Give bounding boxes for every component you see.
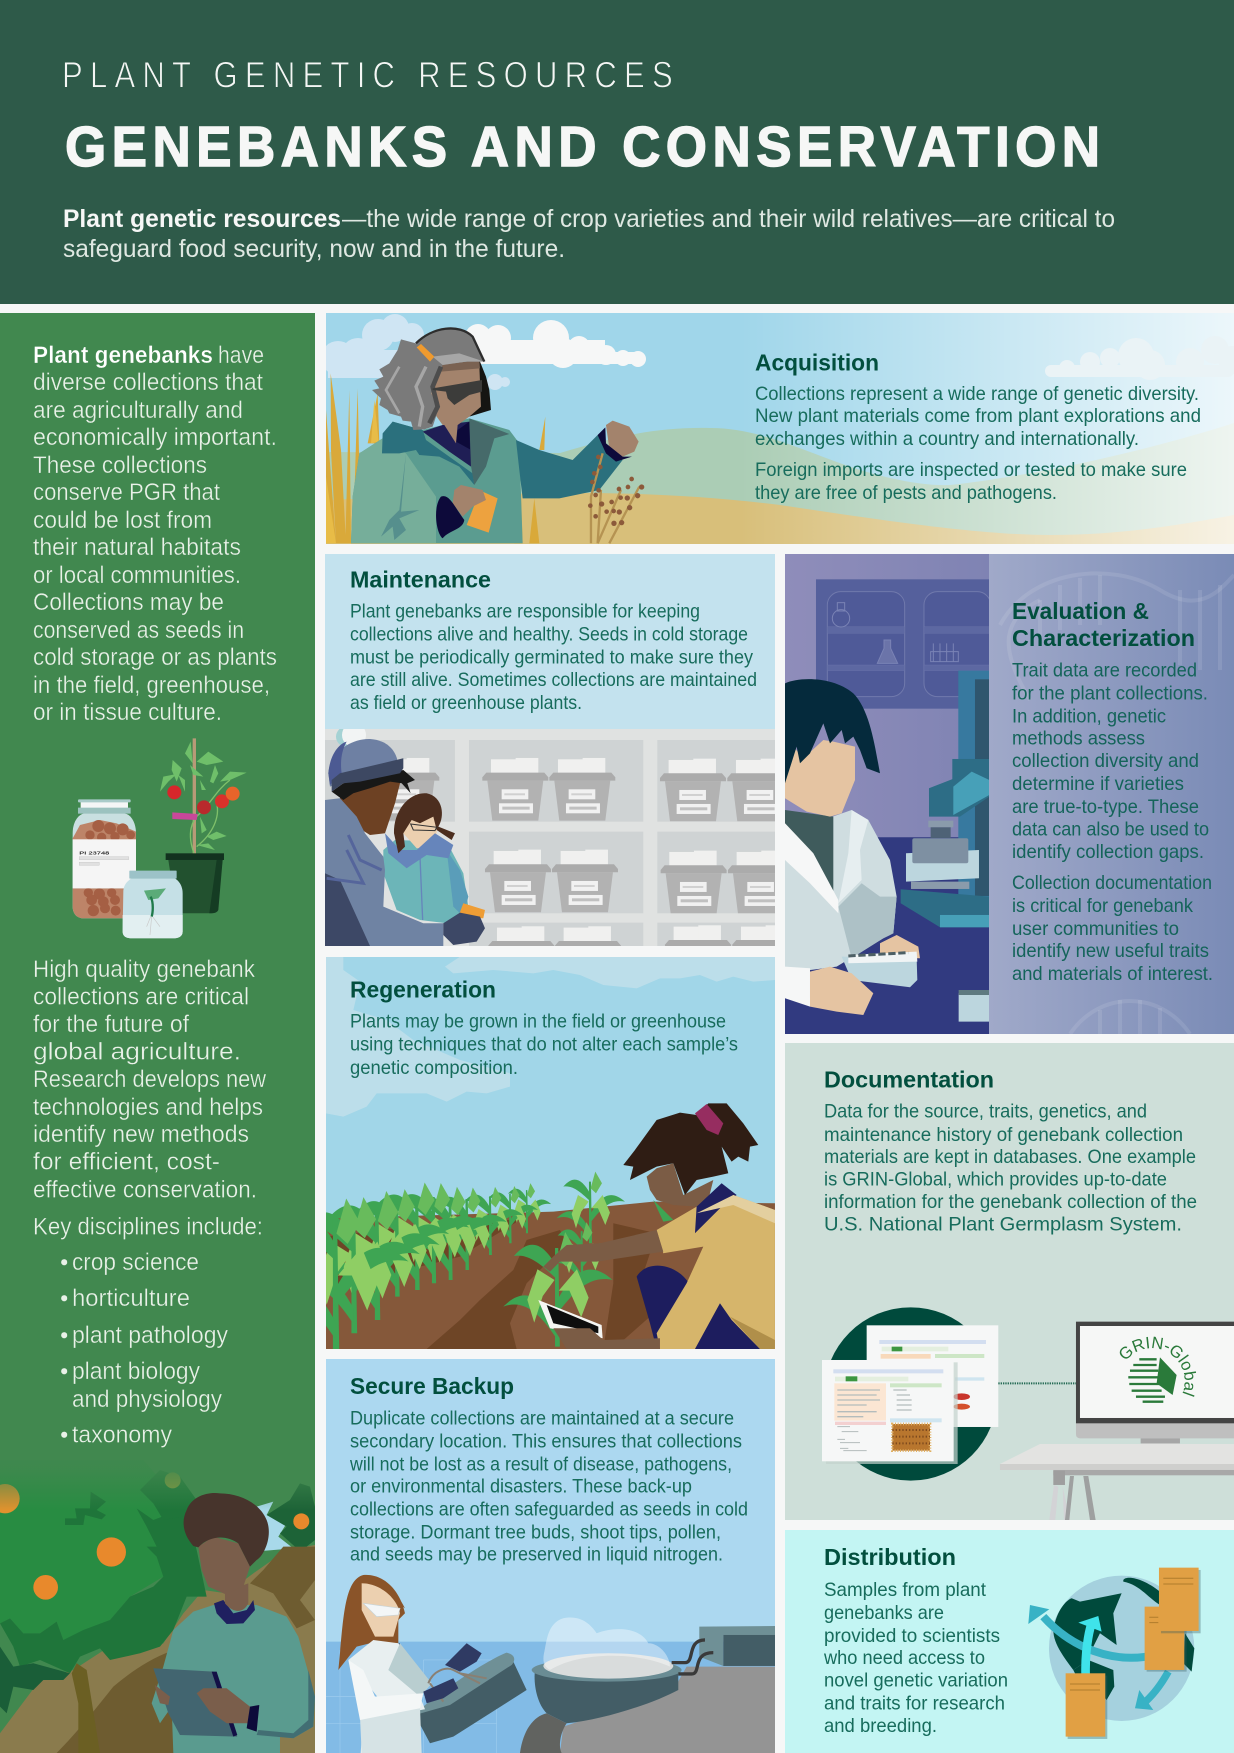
- text: maintenance body: are still alive. Sometimes collections are maintained: [350, 669, 757, 691]
- text: evaluation body: for the plant collections.: [1012, 682, 1208, 704]
- text block: research: global agriculture.: [33, 1038, 241, 1066]
- text: secure backup body: secondary location. This ensures that collections: [350, 1430, 742, 1452]
- panel: documentation: [785, 1043, 1234, 1520]
- illustration: database screens and computer: GRIN-Global: [1120, 1336, 1196, 1397]
- text: evaluation body: identify collection gaps.: [1012, 841, 1204, 863]
- text: regeneration body: genetic composition.: [350, 1057, 518, 1079]
- text: secure backup body: storage. Dormant tree buds, shoot tips, pollen,: [350, 1522, 721, 1544]
- text block: research: effective conservation.: [33, 1176, 257, 1204]
- text: secure backup body: collections are often safeguarded as seeds in cold: [350, 1498, 748, 1520]
- text: evaluation body: and materials of interest.: [1012, 963, 1213, 985]
- heading: maintenance: Maintenance: [350, 566, 491, 592]
- text: regeneration body: using techniques that do not alter each sample’s: [350, 1034, 738, 1056]
- text block: plant genebanks: [33, 342, 277, 726]
- text: maintenance body: [350, 600, 757, 714]
- text: evaluation body: is critical for genebank: [1012, 895, 1193, 917]
- text block: plant genebanks: have: [218, 342, 264, 369]
- text block: plant genebanks: could be lost from: [33, 507, 212, 534]
- text block: plant genebanks: These collections: [33, 452, 207, 479]
- illustration: cryogenic storage: [326, 1359, 776, 1753]
- panel: maintenance: [325, 554, 775, 946]
- text: evaluation body: methods assess: [1012, 728, 1145, 750]
- text: maintenance body: collections alive and healthy. Seeds in cold storage: [350, 624, 748, 646]
- text: evaluation body: In addition, genetic: [1012, 706, 1166, 728]
- text block: research: technologies and helps: [33, 1094, 263, 1121]
- icon: seed jars and tomato plant: PI 23748: [79, 850, 110, 855]
- illustration: database screens and computer: [822, 1307, 1234, 1520]
- panel: regeneration: [326, 957, 775, 1349]
- list: key disciplines: and physiology: [72, 1386, 222, 1413]
- text: documentation body: U.S. National Plant Germplasm System.: [824, 1214, 1182, 1236]
- heading: evaluation and characterization: Characterization: [1012, 625, 1195, 651]
- text: acquisition body: New plant materials come from plant explorations and: [755, 405, 1201, 427]
- list: key disciplines: horticulture: [72, 1285, 190, 1312]
- text: evaluation body: user communities to: [1012, 918, 1179, 940]
- text: secure backup body: or environmental disasters. These back-up: [350, 1476, 692, 1498]
- text block: plant genebanks: in the field, greenhouse,: [33, 672, 270, 699]
- text: maintenance body: must be periodically germinated to make sure they: [350, 646, 753, 668]
- text: distribution body: provided to scientists: [824, 1625, 1000, 1647]
- text block: plant genebanks: or in tissue culture.: [33, 699, 222, 726]
- text: maintenance body: Plant genebanks are responsible for keeping: [350, 600, 700, 622]
- panel: left sidebar: [0, 313, 315, 1753]
- text panel background: [989, 554, 1234, 1034]
- text: secure backup body: Duplicate collections are maintained at a secure: [350, 1408, 734, 1430]
- text: evaluation body: [1012, 660, 1213, 985]
- text: acquisition body: Collections represent a wide range of genetic diversity.: [755, 383, 1199, 405]
- panel: distribution: [785, 1530, 1234, 1753]
- illustration: field technician in corn: [326, 957, 775, 1349]
- title: GENEBANKS AND CONSERVATION: [65, 114, 1100, 178]
- text: distribution body: novel genetic variation: [824, 1670, 1008, 1692]
- intro text: —the wide range of crop varieties and their wild relatives—are critical to: [342, 205, 1115, 233]
- heading: regeneration: Regeneration: [350, 976, 496, 1002]
- text block: plant genebanks: or local communities.: [33, 562, 241, 589]
- text: evaluation body: identify new useful traits: [1012, 940, 1209, 962]
- intro text: safeguard food security, now and in the future.: [63, 235, 565, 263]
- text: evaluation body: determine if varieties: [1012, 773, 1184, 795]
- header banner: [0, 0, 1234, 304]
- text: distribution body: [823, 1579, 1008, 1737]
- list: key disciplines: •: [60, 1358, 68, 1385]
- text: regeneration body: Plants may be grown in the field or greenhouse: [350, 1010, 726, 1032]
- text block: research: collections are critical: [33, 984, 249, 1010]
- text block: research: Research develops new: [33, 1066, 267, 1093]
- text: evaluation body: Collection documentation: [1012, 872, 1212, 894]
- text: evaluation body: are true-to-type. These: [1012, 796, 1199, 818]
- text block: research: for the future of: [33, 1011, 189, 1038]
- text: acquisition body: exchanges within a country and internationally.: [755, 428, 1139, 450]
- list: key disciplines: •: [60, 1422, 68, 1448]
- panel: secure backup: [326, 1359, 776, 1753]
- icon: seed jars and tomato plant: [73, 738, 247, 938]
- list: key disciplines: taxonomy: [72, 1422, 172, 1448]
- panel: evaluation and characterization: [785, 554, 1234, 1034]
- heading: evaluation and characterization: [1012, 598, 1195, 651]
- text block: plant genebanks: diverse collections that: [33, 369, 263, 396]
- text: distribution body: and traits for research: [824, 1692, 1005, 1714]
- heading: acquisition: Acquisition: [755, 350, 879, 376]
- text: maintenance body: as field or greenhouse plants.: [350, 692, 582, 714]
- heading: secure backup: Secure Backup: [350, 1373, 514, 1399]
- list: key disciplines: •: [60, 1249, 68, 1276]
- text: evaluation body: data can also be used to: [1012, 818, 1209, 840]
- illustration: cold storage workers: [325, 729, 775, 946]
- list: key disciplines: crop science: [72, 1249, 199, 1276]
- text: distribution body: who need access to: [823, 1647, 985, 1669]
- text block: plant genebanks: economically important.: [33, 424, 277, 451]
- text: secure backup body: will not be lost as a result of disease, pathogens,: [349, 1454, 732, 1476]
- text: documentation body: is GRIN-Global, which provides up-to-date: [824, 1168, 1167, 1190]
- text: acquisition body: they are free of pests and pathogens.: [755, 482, 1057, 504]
- list: key disciplines: •: [60, 1285, 68, 1312]
- list: key disciplines: plant biology: [72, 1358, 200, 1385]
- text block: research: Key disciplines include:: [33, 1214, 263, 1240]
- text block: plant genebanks: their natural habitats: [33, 534, 241, 561]
- text: documentation body: [824, 1100, 1197, 1236]
- intro text: [63, 205, 1115, 263]
- text block: plant genebanks: Plant genebanks: [33, 342, 213, 369]
- text: documentation body: Data for the source, traits, genetics, and: [824, 1100, 1147, 1122]
- text: acquisition body: [755, 383, 1201, 504]
- list: key disciplines: plant pathology: [72, 1322, 228, 1349]
- text block: plant genebanks: conserved as seeds in: [33, 617, 244, 644]
- text: regeneration body: [350, 1010, 738, 1079]
- text block: plant genebanks: cold storage or as plants: [33, 644, 277, 671]
- text block: research: High quality genebank: [33, 956, 256, 983]
- illustration: lab scientist: [785, 554, 991, 1034]
- illustration: field collector: [321, 313, 1234, 544]
- icon: globe with seed packets and arrows: [1028, 1568, 1201, 1739]
- heading: distribution: Distribution: [824, 1544, 956, 1570]
- text block: research: identify new methods: [33, 1121, 249, 1148]
- text block: plant genebanks: conserve PGR that: [33, 479, 220, 506]
- text: distribution body: and breeding.: [824, 1715, 937, 1737]
- text: secure backup body: [349, 1408, 748, 1566]
- list: key disciplines: [60, 1249, 228, 1448]
- panel: acquisition: [321, 313, 1234, 544]
- text: documentation body: maintenance history of genebank collection: [824, 1124, 1183, 1146]
- heading: evaluation and characterization: Evaluation &: [1012, 598, 1149, 624]
- text: evaluation body: Trait data are recorded: [1012, 660, 1197, 682]
- heading: documentation: Documentation: [824, 1066, 994, 1092]
- text: evaluation body: collection diversity and: [1012, 750, 1199, 772]
- text block: plant genebanks: Collections may be: [33, 589, 224, 616]
- text block: research: [33, 956, 267, 1240]
- list: key disciplines: •: [60, 1322, 68, 1349]
- text: documentation body: materials are kept in databases. One example: [824, 1146, 1196, 1168]
- text: distribution body: genebanks are: [824, 1602, 944, 1624]
- intro text: Plant genetic resources: [63, 205, 341, 233]
- text: documentation body: information for the genebank collection of the: [824, 1191, 1197, 1213]
- text block: research: for efficient, cost-: [33, 1148, 220, 1176]
- text block: plant genebanks: are agriculturally and: [33, 397, 243, 424]
- subtitle: PLANT GENETIC RESOURCES: [62, 55, 673, 96]
- illustration: orchard researcher: [0, 1447, 315, 1753]
- text: secure backup body: and seeds may be preserved in liquid nitrogen.: [350, 1544, 723, 1566]
- text: distribution body: Samples from plant: [824, 1579, 987, 1601]
- text: acquisition body: Foreign imports are inspected or tested to make sure: [755, 459, 1187, 481]
